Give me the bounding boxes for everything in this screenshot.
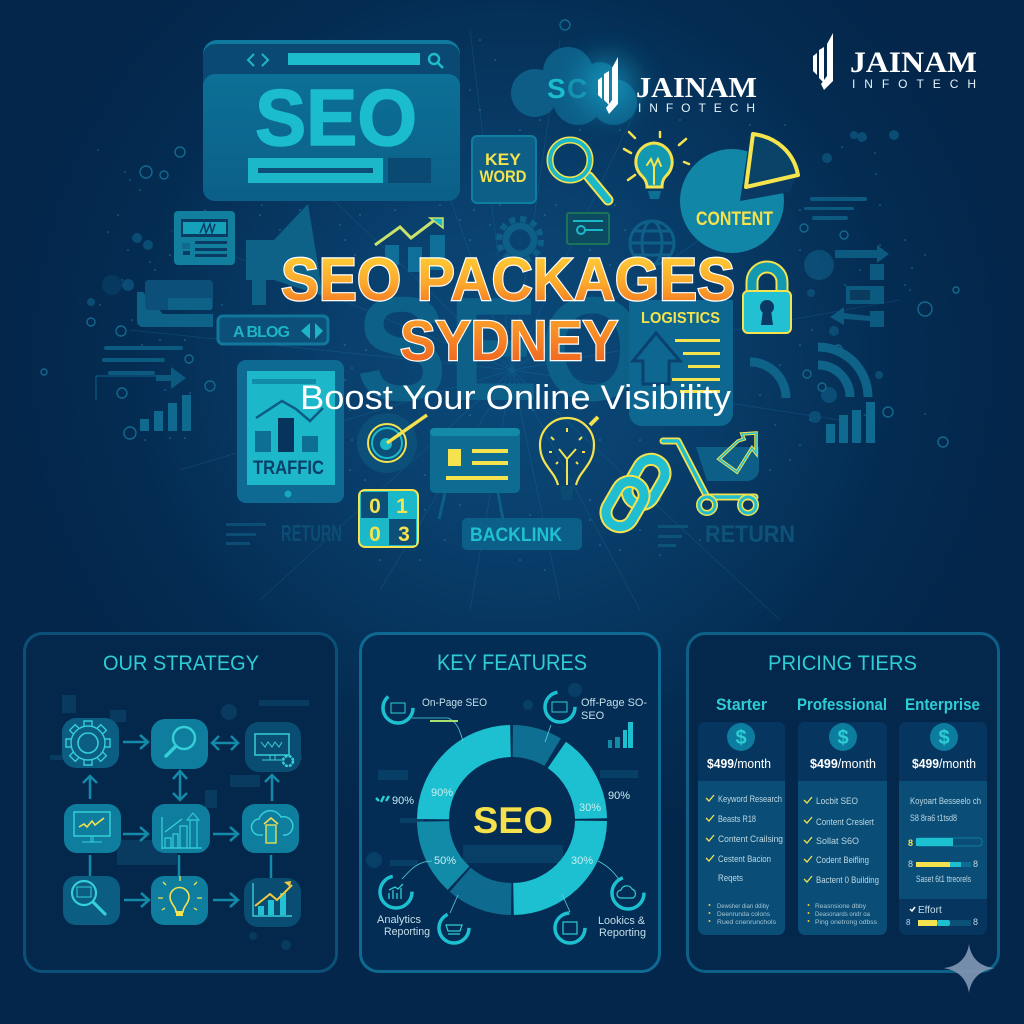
- cloud icon: S: [547, 73, 566, 104]
- feature labels: Reporting: [384, 926, 430, 938]
- wifi signal icon: [750, 347, 868, 398]
- tier: professional: [798, 722, 887, 935]
- tier: starter: Rued cnenrunchols: [717, 919, 777, 926]
- logo: Jainam Infotech top right: [813, 33, 977, 91]
- tier: starter: [698, 722, 785, 935]
- pie chart: content: CONTENT: [696, 209, 773, 230]
- right background list with arrows: [804, 197, 889, 327]
- panel: pricing tiers: [688, 634, 998, 972]
- sparkle watermark: [943, 944, 995, 993]
- icon: target with arrow: [357, 413, 427, 473]
- connector lines: [402, 718, 620, 913]
- tile: monitor chart: [64, 804, 121, 853]
- tablet: traffic: TRAFFIC: [253, 458, 324, 479]
- feature labels: SEO: [581, 710, 605, 722]
- donut percent labels: 50%: [434, 855, 456, 867]
- title: Sydney: SYDNEY: [400, 309, 618, 373]
- tier headings: Starter: [716, 695, 767, 714]
- process connectors: [83, 735, 279, 907]
- donut percent labels: 90%: [392, 795, 414, 807]
- feature icon: cloud: [612, 877, 644, 909]
- tier: enterprise: 8: [908, 838, 913, 848]
- tier: enterprise: 8: [973, 859, 978, 869]
- return label right: [658, 521, 795, 548]
- cloud icon: C: [567, 73, 587, 104]
- tier: professional: Codent Beifling: [816, 855, 869, 866]
- icon: megaphone: [246, 204, 323, 305]
- tier: starter: Cestent Bacion: [718, 854, 771, 865]
- icon: globe: [630, 221, 674, 265]
- feature marker: [430, 720, 458, 722]
- feature icon: cart: [439, 913, 469, 943]
- tier headings: [716, 695, 980, 714]
- feature icon: report: [555, 913, 585, 943]
- donut centre label: SEO: [473, 800, 553, 841]
- donut percent labels: 30%: [579, 802, 601, 814]
- tier: professional: Sollat S6O: [816, 836, 859, 847]
- tile: magnifier: [151, 719, 208, 769]
- tier: enterprise: Effort: [918, 905, 942, 916]
- tile: monitor with cog: [245, 722, 301, 772]
- donut percent labels: [392, 787, 630, 867]
- icon: magnifying glass: [550, 140, 608, 200]
- browser window with SEO: [203, 40, 460, 201]
- return label left: [226, 520, 342, 546]
- tier headings: Professional: [797, 695, 887, 714]
- tier: professional: Reasnsione dbby: [815, 903, 867, 910]
- key card: [567, 213, 609, 244]
- tier: enterprise: $499/month: [912, 756, 976, 771]
- tier: enterprise: $: [938, 727, 950, 749]
- background big SEO letters: SEO: [356, 267, 646, 432]
- number grid: 0: [369, 523, 381, 546]
- tile: idea bulb: [151, 876, 208, 925]
- backlink pill: BACKLINK: [470, 525, 562, 546]
- icon: light bulb: [624, 132, 689, 199]
- tier: starter: Dewsher dian ddiby: [717, 903, 770, 910]
- number grid: 3: [398, 523, 410, 546]
- backlink pill: [462, 518, 582, 550]
- logo: Jainam Infotech centre: [582, 57, 757, 115]
- panel: our strategy: [24, 634, 336, 972]
- tile: growth arrow: [244, 878, 301, 927]
- tagline: Boost Your Online Visibility: [300, 379, 731, 417]
- heading: OUR STRATEGY: [103, 652, 259, 675]
- number grid: 0: [369, 495, 381, 518]
- left background list and arrow: [96, 346, 186, 400]
- panel background faint shapes: [366, 683, 638, 868]
- tier: enterprise: 8: [973, 917, 978, 927]
- heading: KEY FEATURES: [437, 650, 587, 675]
- tier: professional: Bactent 0 Building: [816, 875, 879, 886]
- feature icon: analytics: [380, 876, 412, 908]
- tier: enterprise: [899, 722, 987, 935]
- keyword card: [472, 136, 536, 203]
- rising trend chart: [375, 218, 445, 272]
- blog pill: [218, 316, 328, 344]
- title: SEO Packages: SEO PACKAGES: [281, 246, 735, 313]
- tier: professional: $: [837, 727, 849, 749]
- number grid: [359, 490, 418, 547]
- tier: enterprise: S8 8ra6 t1tsd8: [910, 813, 957, 823]
- donut percent labels: 90%: [608, 790, 630, 802]
- return label left: RETURN: [281, 520, 342, 546]
- cloud icon: [511, 47, 637, 125]
- tier headings: Enterprise: [905, 695, 980, 714]
- feature labels: Off-Page SO-: [581, 697, 647, 709]
- donut percent labels: 90%: [431, 787, 453, 799]
- donut chart: [400, 708, 624, 932]
- feature labels: Analytics: [377, 914, 421, 926]
- heading: PRICING TIERS: [768, 652, 917, 675]
- news card: [174, 211, 235, 265]
- small bar chart: [608, 722, 633, 748]
- panel background faint shapes: [50, 695, 309, 950]
- left background bars: [140, 395, 191, 431]
- tile: growth bars: [152, 804, 210, 853]
- logistics card: LOGISTICS: [641, 310, 720, 327]
- feature icon: off-page: [545, 692, 575, 722]
- feature labels: Lookics &: [598, 915, 646, 927]
- right background bars: [826, 402, 875, 443]
- icon: outline bulb: [540, 417, 598, 500]
- donut percent labels: 30%: [571, 855, 593, 867]
- tablet: traffic: [237, 360, 344, 503]
- tier: professional: $499/month: [810, 756, 876, 771]
- feature labels: Reporting: [599, 927, 646, 939]
- browser window with SEO: SEO: [255, 73, 417, 162]
- blog pill: A BLOG: [233, 324, 290, 341]
- icon: padlock: [743, 267, 791, 333]
- tier: enterprise: Saset 6t1 ttreorels: [916, 874, 971, 884]
- number grid: 1: [396, 495, 408, 518]
- tier: enterprise: 8: [908, 859, 913, 869]
- panel: key features: [360, 634, 660, 972]
- tier: starter: Reqets: [718, 873, 743, 884]
- tier: enterprise: Koyoart Besseelo ch: [910, 796, 981, 806]
- icon: gear: [499, 219, 541, 261]
- keyword card: WORD: [480, 167, 526, 186]
- tier: professional: Ping onetrong odbss: [815, 919, 878, 926]
- feature icon: on-page: [383, 693, 413, 723]
- tier: professional: Content Creslert: [816, 817, 874, 828]
- logo: Jainam Infotech centre: JAINAM: [636, 73, 757, 104]
- tile: cloud home: [242, 804, 299, 853]
- keyword card: KEY: [485, 150, 522, 169]
- tile: gear: [62, 718, 119, 768]
- return label right: RETURN: [705, 521, 795, 548]
- folder icon: [137, 280, 213, 327]
- icon: chain link: [601, 454, 670, 532]
- tier: starter: Keyword Research: [718, 794, 782, 805]
- logo: Jainam Infotech top right: JAINAM: [850, 46, 977, 79]
- check mark with value: [376, 796, 389, 802]
- tier: starter: Content Crailsing: [718, 834, 783, 845]
- tier: starter: $499/month: [707, 756, 771, 771]
- feature labels: [377, 697, 647, 939]
- tier: professional: Deasonards ondr oa: [815, 911, 870, 918]
- logo: Jainam Infotech centre: INFOTECH: [638, 101, 755, 115]
- tier: starter: Beasts R18: [718, 814, 756, 825]
- pie chart: content: [680, 134, 800, 253]
- logo: Jainam Infotech top right: INFOTECH: [852, 77, 976, 91]
- tier: starter: $: [735, 727, 747, 749]
- tier: professional: Locbit SEO: [816, 796, 858, 807]
- icon: cart with tag: [663, 433, 759, 513]
- billboard card: [430, 428, 520, 519]
- tier: starter: Deenrunda colons: [717, 911, 771, 918]
- feature labels: On-Page SEO: [422, 697, 487, 709]
- logistics card: [629, 300, 733, 426]
- tier: enterprise: 8: [906, 918, 911, 927]
- tile: search screen: [63, 876, 120, 925]
